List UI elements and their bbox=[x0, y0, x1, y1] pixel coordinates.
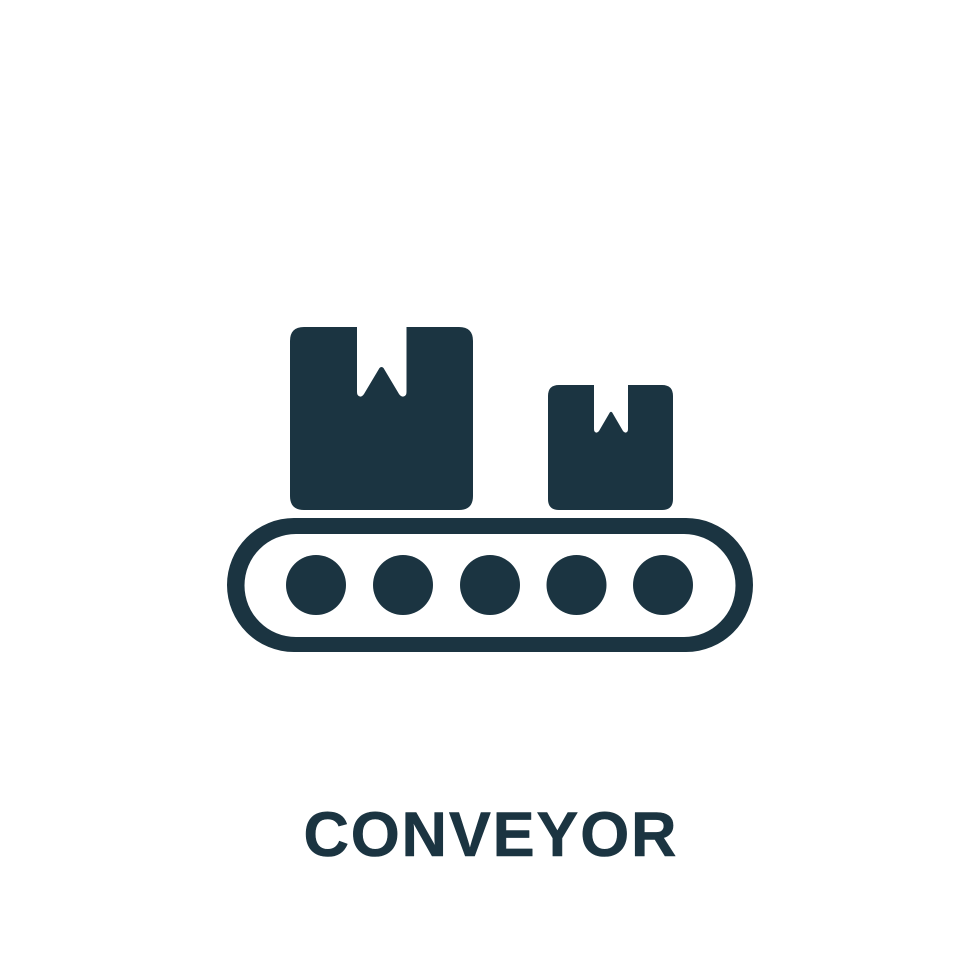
icon: large box bbox=[290, 327, 473, 510]
icon: small box bbox=[548, 385, 673, 510]
belt outline bbox=[227, 518, 753, 652]
icon: conveyor belt bbox=[227, 518, 753, 652]
rollers bbox=[286, 555, 693, 615]
title: CONVEYOR bbox=[304, 800, 676, 870]
